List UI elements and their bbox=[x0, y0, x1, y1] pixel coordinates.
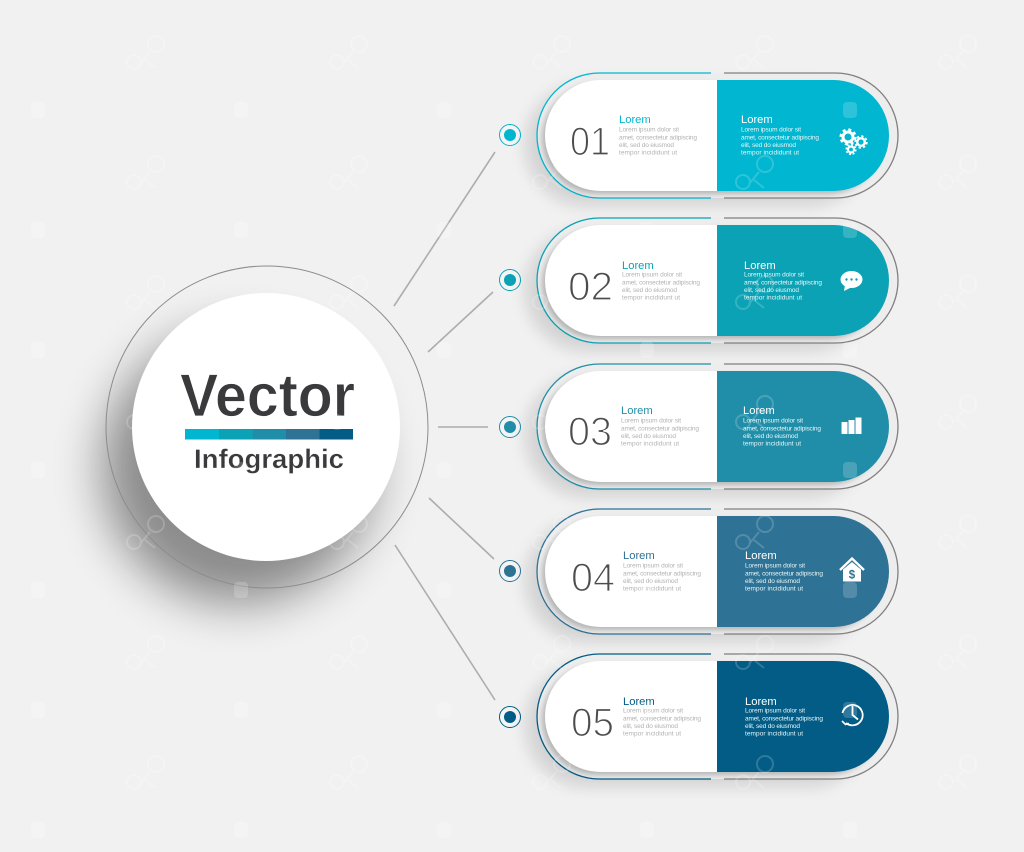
body left: amet, consectetur adipiscing bbox=[623, 570, 701, 578]
number 02: 02 bbox=[568, 265, 613, 309]
icon: house with dollar bbox=[840, 558, 864, 582]
body right bbox=[741, 126, 819, 156]
body left: Lorem ipsum dolor sit bbox=[623, 562, 683, 570]
body right: tempor incididunt ut bbox=[745, 730, 803, 738]
number 05: 05 bbox=[571, 701, 614, 745]
body left: amet, consectetur adipiscing bbox=[619, 134, 697, 142]
connector lines bbox=[394, 152, 495, 700]
marker 03 bbox=[500, 416, 520, 438]
body right: amet, consectetur adipiscing bbox=[743, 426, 821, 432]
body right: tempor incididunt ut bbox=[744, 294, 802, 302]
panel: step 02 bbox=[525, 218, 898, 351]
body left: tempor incididunt ut bbox=[623, 730, 681, 738]
panel: step 05 bbox=[525, 654, 898, 787]
panel: step 01 bbox=[525, 73, 898, 206]
central circle bbox=[102, 266, 428, 604]
body right bbox=[744, 272, 822, 302]
body right: tempor incididunt ut bbox=[745, 586, 803, 592]
heading left: Lorem bbox=[622, 260, 654, 272]
body right: Lorem ipsum dolor sit bbox=[745, 708, 805, 714]
body left: amet, consectetur adipiscing bbox=[622, 280, 700, 286]
body left: tempor incididunt ut bbox=[619, 150, 677, 156]
subtitle: Infographic: Infographic bbox=[194, 444, 344, 474]
number 04: 04 bbox=[571, 556, 615, 600]
heading right: Lorem bbox=[743, 405, 775, 417]
number 01: 01 bbox=[570, 120, 610, 164]
marker 05 bbox=[500, 706, 520, 728]
title: Vector: Vector bbox=[180, 362, 355, 429]
body left: elit, sed do eiusmod bbox=[623, 723, 678, 730]
body right bbox=[745, 562, 823, 592]
body left bbox=[619, 126, 697, 156]
body left: amet, consectetur adipiscing bbox=[623, 716, 701, 722]
body right bbox=[745, 708, 823, 738]
icon: gears bbox=[840, 130, 867, 154]
body right: elit, sed do eiusmod bbox=[745, 578, 800, 585]
body right: tempor incididunt ut bbox=[741, 150, 799, 156]
body right: elit, sed do eiusmod bbox=[741, 142, 796, 149]
heading right: Lorem bbox=[745, 550, 777, 562]
body left: tempor incididunt ut bbox=[621, 440, 679, 448]
body left: Lorem ipsum dolor sit bbox=[619, 126, 679, 134]
number 03: 03 bbox=[568, 410, 612, 454]
icon: speech bubble bbox=[840, 271, 862, 291]
body right: Lorem ipsum dolor sit bbox=[745, 562, 805, 570]
marker 01 bbox=[500, 124, 520, 146]
heading left: Lorem bbox=[619, 114, 651, 126]
heading right: Lorem bbox=[744, 260, 776, 272]
icon: clock bbox=[842, 705, 863, 725]
heading left: Lorem bbox=[621, 405, 653, 417]
body left bbox=[623, 708, 701, 738]
body right: amet, consectetur adipiscing bbox=[745, 570, 823, 578]
heading left: Lorem bbox=[623, 550, 655, 562]
body left: Lorem ipsum dolor sit bbox=[621, 418, 681, 424]
body left: elit, sed do eiusmod bbox=[623, 578, 678, 585]
body right: tempor incididunt ut bbox=[743, 440, 801, 448]
body left: elit, sed do eiusmod bbox=[621, 433, 676, 440]
icon: bar chart bbox=[842, 418, 862, 434]
colour bar bbox=[185, 429, 353, 440]
icon: house with dollar: $ bbox=[849, 570, 856, 582]
body right: elit, sed do eiusmod bbox=[745, 723, 800, 730]
body right: amet, consectetur adipiscing bbox=[745, 716, 823, 722]
body left: tempor incididunt ut bbox=[622, 294, 680, 302]
body right: Lorem ipsum dolor sit bbox=[743, 418, 803, 424]
heading left: Lorem bbox=[623, 696, 655, 708]
body right: elit, sed do eiusmod bbox=[744, 287, 799, 294]
body left: tempor incididunt ut bbox=[623, 586, 681, 592]
body right: elit, sed do eiusmod bbox=[743, 433, 798, 440]
body right: Lorem ipsum dolor sit bbox=[744, 272, 804, 278]
body right: Lorem ipsum dolor sit bbox=[741, 126, 801, 134]
body left bbox=[622, 272, 700, 302]
heading right: Lorem bbox=[741, 114, 773, 126]
body left: elit, sed do eiusmod bbox=[622, 287, 677, 294]
body left: amet, consectetur adipiscing bbox=[621, 426, 699, 432]
panel: step 04 bbox=[525, 509, 898, 642]
body right: amet, consectetur adipiscing bbox=[744, 280, 822, 286]
body left bbox=[623, 562, 701, 592]
body right bbox=[743, 418, 821, 448]
body left bbox=[621, 418, 699, 448]
marker 02 bbox=[500, 270, 520, 290]
marker 04 bbox=[500, 560, 520, 582]
heading right: Lorem bbox=[745, 696, 777, 708]
body left: Lorem ipsum dolor sit bbox=[623, 708, 683, 714]
body left: Lorem ipsum dolor sit bbox=[622, 272, 682, 278]
body right: amet, consectetur adipiscing bbox=[741, 134, 819, 142]
panel: step 03 bbox=[525, 364, 898, 497]
body left: elit, sed do eiusmod bbox=[619, 142, 674, 149]
